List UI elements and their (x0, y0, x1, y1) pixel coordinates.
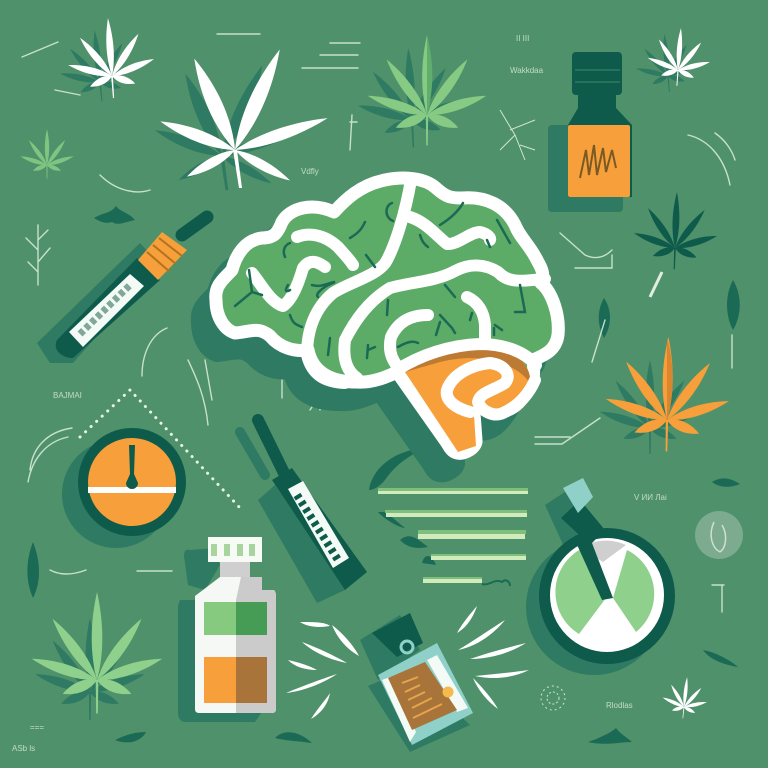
dotted arc (80, 390, 240, 508)
clock face (550, 538, 664, 652)
jar: lower right (360, 613, 473, 752)
pointer (574, 530, 613, 600)
gauge ring (78, 428, 186, 536)
jar body (378, 643, 473, 745)
jar cap (372, 613, 423, 657)
vial cap (572, 52, 622, 95)
sulci white lines (252, 180, 545, 414)
bottle green label (204, 602, 236, 635)
bottle body shadow (178, 600, 200, 722)
bars (378, 491, 528, 583)
dropper shadow (37, 243, 160, 363)
brain (198, 178, 558, 475)
vial label (568, 125, 630, 197)
clock green wedge left (555, 548, 606, 634)
scribble labels (12, 34, 667, 753)
jar label lines (402, 677, 442, 718)
dropper collar (138, 232, 187, 280)
scribble labels: II III (516, 34, 529, 43)
dropper: centre (240, 420, 367, 603)
sulci dark marks (235, 203, 525, 358)
leaf: orange (598, 336, 732, 454)
clock shadow (526, 539, 662, 675)
vial body (568, 94, 632, 197)
dropper: left (37, 217, 207, 363)
leaf: right dark (632, 191, 720, 297)
bottle neck shadow (184, 548, 220, 590)
icon: herb doodle (500, 110, 565, 710)
gauge needle (126, 445, 138, 489)
small dark sprigs (27, 206, 740, 744)
bottle orange label (204, 657, 236, 703)
bars dim lower edge (378, 488, 528, 579)
bar chart (378, 488, 528, 586)
cerebellum shading (405, 349, 530, 383)
vial: top right (548, 52, 632, 212)
bar shadows (378, 512, 436, 565)
cerebrum fill and outline (216, 178, 558, 453)
rays right of jar (457, 606, 529, 709)
scribble labels: BAJMAI (53, 391, 82, 400)
leaf: top right white (633, 26, 713, 95)
leaf: large white (153, 46, 330, 190)
dropper label (288, 481, 349, 568)
pointer teal cap (563, 478, 593, 513)
dropper thin tube (258, 420, 285, 475)
handle shadow (545, 492, 600, 560)
cerebellum orange (405, 349, 530, 452)
dropper body (56, 258, 160, 358)
jar shadow (368, 668, 470, 752)
dropper tube shadow (240, 432, 265, 475)
scribble labels: Vdfly (301, 167, 319, 176)
leaf: left small green (20, 129, 74, 179)
scribble labels: Rlodlas (606, 701, 633, 710)
icon: faded disc (695, 511, 743, 559)
gauge shadow (62, 440, 170, 548)
leaf: bottom-left green (30, 592, 164, 720)
clock grey wedge (580, 541, 626, 562)
rays left of jar (286, 622, 359, 719)
leaf: top-left white (55, 15, 158, 106)
gauge dial (62, 390, 240, 548)
jar label (388, 662, 457, 730)
clock ring (539, 528, 675, 664)
vial shadow (548, 125, 623, 212)
scribble labels: V ИИ Лаі (634, 493, 667, 502)
jar knob (401, 641, 413, 653)
vial label scribble (580, 145, 616, 178)
pointer handle (561, 500, 605, 545)
jar label dot (442, 686, 454, 698)
dropper tip (182, 217, 207, 235)
gauge band (88, 487, 176, 493)
bottle body (195, 577, 276, 713)
bottle: lower centre (178, 537, 276, 722)
dropper shadow (258, 485, 345, 603)
scribble labels: Wakkdaa (510, 66, 544, 75)
dropper body (272, 468, 367, 590)
bottle cap (208, 537, 262, 562)
decorative thin lines (22, 34, 735, 612)
gauge face (88, 438, 176, 526)
bottle neck (220, 562, 250, 578)
clock chart: right (526, 478, 675, 675)
brain shadow (198, 200, 540, 475)
jar white left strip (382, 677, 416, 742)
scribble labels: ASb ls (12, 744, 35, 753)
bottle cap ticks (214, 544, 252, 556)
leaf: top centre green (354, 35, 488, 150)
leaf: bottom right small white (660, 675, 710, 721)
scribble labels: === (30, 723, 44, 732)
clock green wedge right (613, 550, 654, 632)
bar end sprig (482, 580, 510, 586)
dropper label (69, 274, 144, 347)
jar white right panel (427, 655, 468, 712)
